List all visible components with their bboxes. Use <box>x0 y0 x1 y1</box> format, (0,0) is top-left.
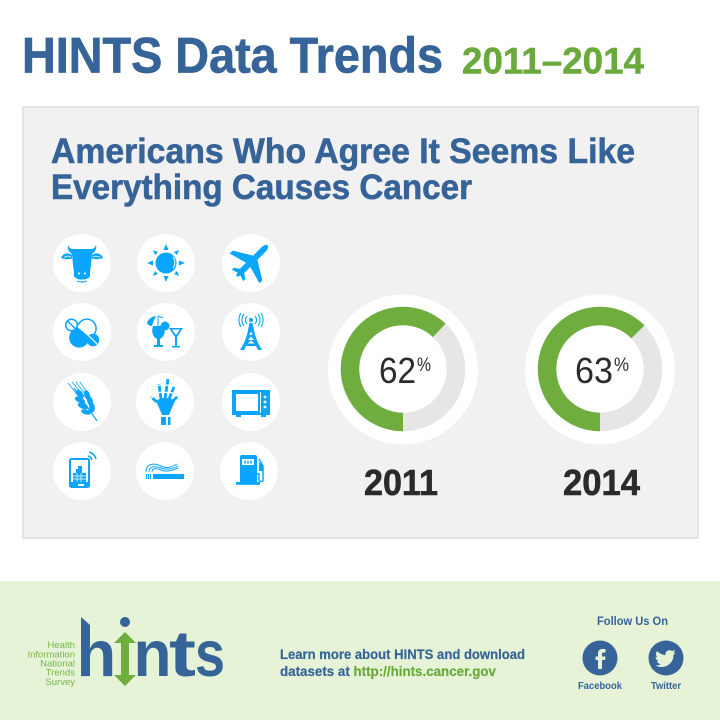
icon: airplane <box>222 231 282 292</box>
title: 2011–2014 <box>462 40 644 82</box>
label: 63%: % <box>614 355 629 376</box>
social links <box>578 614 684 692</box>
logo: HINTS: h <box>76 617 116 690</box>
social links: Twitter <box>651 680 681 692</box>
icon: pills <box>53 303 111 361</box>
label: 62%: 62 <box>379 350 416 391</box>
logo tagline: Health <box>48 640 75 651</box>
icon: Facebook <box>582 640 618 676</box>
icon: cocktails <box>137 303 195 361</box>
footer text <box>280 646 525 679</box>
icon: microwave <box>222 373 280 431</box>
icon: Twitter <box>648 640 684 676</box>
logo tagline: Survey <box>45 677 75 688</box>
logo: HINTS: s <box>195 617 225 690</box>
chart: 2011 donut <box>328 294 478 503</box>
label: 63%: 63 <box>575 350 613 391</box>
title: HINTS Data Trends <box>22 28 443 84</box>
icon: gas pump <box>220 442 278 500</box>
label: year 2011: 2011 <box>364 462 438 503</box>
footer <box>0 581 720 720</box>
icon: hand x-ray <box>136 373 194 431</box>
icon: sun <box>137 234 195 292</box>
icon: cigarette <box>136 442 194 500</box>
icon: cow <box>53 234 111 292</box>
logo tagline: Trends <box>46 668 75 678</box>
panel heading <box>51 132 635 207</box>
footer text: datasets at http://hints.cancer.gov <box>280 663 496 679</box>
logo tagline: National <box>40 658 75 670</box>
social links: Follow Us On <box>597 614 668 628</box>
chart: 2014 donut <box>525 294 675 503</box>
icon: radio tower <box>222 303 280 361</box>
logo: HINTS: n <box>134 617 172 690</box>
logo tagline <box>27 640 75 688</box>
logo: HINTS: t <box>169 617 196 690</box>
footer text: Learn more about HINTS and download <box>280 646 525 662</box>
icon: smartphone <box>53 442 111 500</box>
panel: main <box>23 107 698 538</box>
logo: HINTS <box>27 617 225 690</box>
panel heading: Americans Who Agree It Seems Like <box>51 132 635 171</box>
social links: Facebook <box>578 680 622 692</box>
panel heading: Everything Causes Cancer <box>51 168 472 207</box>
label: 62%: % <box>417 355 431 376</box>
icon grid <box>53 231 282 500</box>
logo tagline: Information <box>27 650 75 660</box>
icon: wheat <box>53 373 111 431</box>
label: year 2014: 2014 <box>563 462 640 503</box>
